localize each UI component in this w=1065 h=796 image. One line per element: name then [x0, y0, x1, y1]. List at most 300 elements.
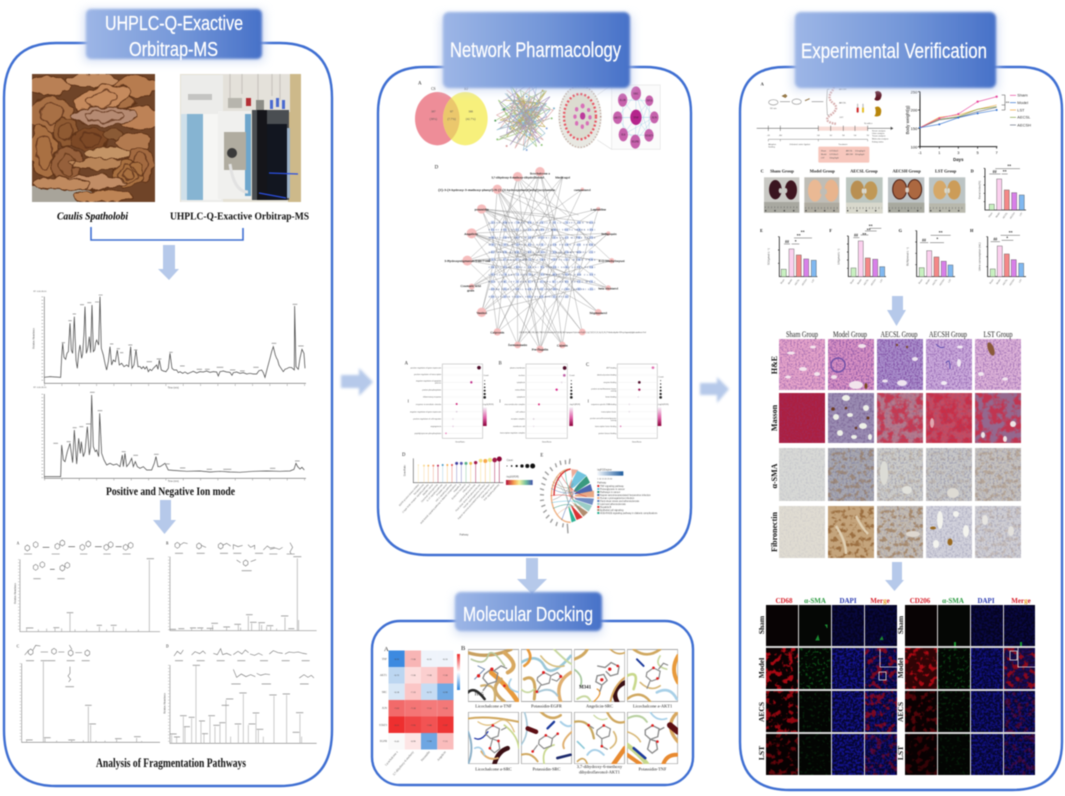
experimental design schematic: Molecular analysis	[872, 137, 888, 140]
line chart: body weight: 1	[938, 150, 941, 155]
title: Experimental Verification: Experimental Verification	[801, 40, 987, 63]
compound-target network: Medicagol	[555, 176, 570, 180]
chart: positive ion chromatogram	[33, 291, 306, 389]
experimental design schematic: 0.9%NaCl	[829, 154, 839, 156]
GO dot plot C: molecular function: I	[588, 399, 590, 403]
GO dot plot B: cellular component: cell surface	[516, 411, 525, 413]
bar chart D: renal index: Model	[996, 212, 1001, 218]
heatmap of binding energies: Angelicin	[436, 750, 447, 762]
arrow: network pharmacology to docking	[517, 558, 547, 594]
KEGG lollipop chart: Bladder cancer	[422, 483, 434, 496]
compound-target network: PTGS2 RELA HIF1A PTGS1 MAPK14 MMP2 VEGFA IKBKB ESR1	[489, 229, 596, 232]
histology image grid: AECSH Group	[929, 330, 967, 339]
bar chart H: urine volume: Model	[996, 279, 1002, 285]
venn diagram: 387	[431, 110, 436, 114]
compound-target network: Cajanin	[557, 343, 568, 347]
arrow: network pharmacology to experimental verification	[700, 377, 729, 403]
KEGG chord diagram: E	[540, 454, 543, 459]
KEGG chord diagram: TNF signaling pathway	[600, 485, 624, 488]
histology image grid: Sham Group	[786, 330, 818, 339]
GO dot plot B: cellular component: B	[499, 361, 502, 366]
bar chart G: blood urea nitrogen: G	[899, 228, 903, 233]
venn diagram: 97	[450, 110, 454, 114]
experimental design schematic: Serum analysis	[872, 129, 886, 132]
experimental design schematic: AECSL	[839, 102, 847, 105]
compound-target network: formononetin	[508, 343, 527, 347]
KEGG lollipop chart: Endocrine resistance	[451, 483, 467, 500]
experimental design schematic: AECSL	[846, 150, 853, 153]
KEGG chord diagram: Human cytomegalovirus infection	[600, 497, 635, 500]
heatmap of binding energies: -7.97	[442, 724, 448, 727]
GO dot plot C: molecular function: protein serine/threonine/tyrosine	[590, 417, 616, 420]
PPI core target circle and top hub genes: SRC	[633, 91, 639, 95]
KEGG lollipop chart: Chemical carcinogenesis	[420, 483, 439, 503]
chart: fragmentation spectrum C: C	[17, 644, 20, 648]
experimental design schematic: A	[761, 81, 765, 86]
docking pose: Angelicin-SRC	[573, 648, 626, 703]
KEGG lollipop chart: Influenza A	[462, 483, 472, 493]
line chart: body weight: **	[1006, 101, 1009, 105]
GO dot plot C: molecular function: -log10(FDR)	[658, 404, 669, 406]
arrow: MS to network pharmacology	[341, 368, 373, 396]
KEGG lollipop chart: Pathway	[460, 533, 469, 536]
GO dot plot B: cellular component: macromolecular complex	[505, 404, 525, 406]
GO dot plot A: biological process: negative regulation of gene expression	[410, 410, 441, 413]
PPI core target circle and top hub genes: TNF	[633, 115, 639, 119]
KEGG lollipop chart: Hepatitis B	[453, 483, 462, 493]
PPI core target circle and top hub genes: IL1B	[620, 98, 626, 102]
KEGG lollipop chart: Human cytomegalovirus infection	[463, 483, 487, 509]
bar chart F: uric acid: **	[867, 228, 871, 233]
docking pose: Licochalcone a-TNF: H15	[475, 692, 484, 698]
heatmap of binding energies: -7.63	[394, 707, 400, 710]
bar chart E: serum creatinine: LST	[812, 279, 816, 283]
bar chart G: blood urea nitrogen: AECSH	[939, 278, 946, 286]
heatmap of binding energies	[379, 646, 460, 777]
bar chart F: uric acid: AECSL	[863, 278, 870, 286]
docking images: Angelicin-SRC	[586, 704, 613, 708]
KEGG lollipop chart: HIF-1 signaling pathway	[435, 483, 453, 503]
kidney photographs: AECSH Group	[893, 168, 921, 173]
bar chart H: urine volume: H	[970, 228, 974, 233]
GO dot plot C: molecular function: GeneRatio	[632, 441, 642, 444]
histology image grid: Fibronectin	[770, 512, 779, 552]
immunofluorescence grid: CD206 with alpha-SMA: CD206	[910, 597, 931, 605]
experimental design schematic: -8d	[779, 135, 783, 137]
GO dot plot B: cellular component: extracellular	[515, 388, 525, 391]
docking images: Potassidin-SRC	[533, 766, 560, 772]
venn diagram: (7.7%)	[448, 117, 456, 121]
PPI core target circle and top hub genes: EGFR	[632, 140, 639, 144]
bar chart D: renal index: ##	[993, 169, 997, 174]
GO dot plot B: cellular component: receptor complex	[511, 418, 525, 421]
compound-target network: PIK3CA ESR2 PRKCA ABCB1 F2 PIK3R1 SOD1 GSTP1 TGFB1	[489, 266, 596, 269]
heatmap of binding energies: -6.58	[394, 691, 400, 694]
bar chart F: uric acid: AECSH	[870, 278, 877, 286]
arrow: biochemistry to histology	[887, 296, 906, 326]
experimental design schematic: 0.9%NaCl	[829, 151, 839, 153]
chart: negative ion chromatogram: Time (min)	[168, 481, 179, 483]
immunofluorescence grid: CD68 with alpha-SMA: Model	[757, 658, 766, 678]
PPI core target circle and top hub genes: AKT1	[614, 116, 622, 120]
GO dot plot A: biological process: angiogenesis	[431, 426, 441, 428]
kidney photographs: Model Group	[810, 168, 835, 173]
kidney photographs: LST Group	[935, 168, 957, 173]
compound-target network: potassidin	[475, 208, 489, 212]
PPI core target circle and top hub genes: IL6	[621, 133, 626, 137]
KEGG lollipop chart: Kaposi sarcoma-associated herpesvirus infection	[457, 483, 491, 520]
bar chart F: uric acid: **	[869, 223, 873, 228]
chart: positive ion chromatogram: Relative Abundance	[33, 327, 36, 349]
compound-target network: MYC EGFR STAT3 TP53 BCL2 IL1B PPARG FOS ERBB2	[489, 244, 596, 247]
heatmap of binding energies: STAT3	[379, 724, 388, 727]
docking images: dihydroflavonol-AKT1	[579, 770, 620, 774]
line chart: body weight: 150	[911, 126, 918, 131]
docking pose: Licochalcone a-AKT1	[626, 648, 679, 703]
heatmap of binding energies: JUN	[382, 707, 387, 710]
compound-target network: Lupinidine	[591, 208, 606, 212]
GO dot plot C: molecular function: enzyme binding	[603, 382, 616, 384]
line chart: body weight: 7	[996, 150, 999, 155]
heatmap of binding energies: -7.15	[442, 740, 448, 743]
experimental design schematic: 10mg/kg/d	[829, 157, 839, 159]
PPI core target circle and top hub genes: STAT3	[645, 133, 654, 137]
bar chart G: blood urea nitrogen: AECSL	[932, 278, 939, 286]
experimental design schematic: LST	[821, 157, 825, 159]
chart: fragmentation spectrum B: B	[166, 542, 169, 546]
GO dot plot C: molecular function: C	[586, 363, 589, 368]
docking pose: Angelicin-SRC: M341	[579, 685, 592, 690]
KEGG chord diagram: Pathway	[597, 481, 607, 484]
bar chart D: renal index: **	[1003, 169, 1007, 174]
docking pose: Licochalcone a-SRC	[467, 712, 520, 765]
bar chart F: uric acid: Sham	[850, 279, 855, 285]
KEGG lollipop chart: Prostate cancer	[436, 483, 448, 497]
experimental design schematic: 0d	[817, 135, 820, 137]
heatmap of binding energies: -7.88	[426, 724, 432, 727]
bar chart F: uric acid: ##	[854, 233, 858, 238]
GO dot plot A: biological process: -log10(FDR)	[483, 404, 494, 406]
compound-target network: licochalcone a	[530, 171, 550, 175]
compound-target network: CYP3A4 RXRA ACHE IGF1 CDK2 MET NOS3 XDH CASP9	[489, 273, 596, 276]
title: UHPLC-Q-Exactive Orbitrap-MS: Orbitrap-MS	[129, 39, 218, 61]
bar chart F: uric acid: **	[862, 232, 866, 237]
docking images: Licochalcone a-AKT1	[633, 704, 672, 708]
GO dot plot A: biological process: A	[405, 361, 409, 366]
KEGG chord diagram: Kaposi sarcoma-associated herpesvirus infection	[600, 494, 651, 497]
experimental design schematic: Sham	[821, 151, 827, 153]
heatmap of binding energies: -6.33	[442, 658, 448, 661]
immunofluorescence grid: CD206 with alpha-SMA: Sham	[896, 615, 905, 634]
docking images: B	[461, 645, 466, 652]
title: UHPLC-Q-Exactive Orbitrap-MS: UHPLC-Q-Exactive	[105, 13, 243, 35]
label: Caulis Spatholobi: Caulis Spatholobi	[57, 212, 128, 222]
GO dot plot C: molecular function: transcription factor	[601, 410, 617, 413]
venn diagram: (42.7%)	[466, 117, 476, 121]
bar chart G: blood urea nitrogen: BUN(mmol·L⁻¹)	[906, 247, 910, 266]
GO dot plot C: molecular function: identical protein binding	[597, 374, 616, 377]
chart: fragmentation spectrum D: Relative Abundance	[163, 692, 166, 714]
venn diagram: CS	[431, 87, 436, 91]
GO dot plot A: biological process: positive regulation of cell migration	[413, 418, 441, 421]
bar chart F: uric acid: LST	[880, 279, 884, 283]
KEGG chord diagram: Fluid shear stress and atherosclerosis	[600, 500, 640, 503]
line chart: body weight: AECSH	[1017, 122, 1031, 127]
protein interaction network	[494, 80, 555, 151]
compound-target network: (Z)-3-(4-hydroxy-3-methoxy-phenyl)-N-[2-(4-hydroxyphenyl)ethyl]acrylamide	[438, 188, 555, 192]
GO dot plot A: biological process: inflammatory response	[423, 396, 441, 399]
GO dot plot C: molecular function: heme binding	[605, 397, 616, 399]
experimental design schematic: -14	[767, 135, 771, 137]
bar chart H: urine volume: AECSH	[1009, 278, 1016, 286]
GO dot plot C: molecular function: sequence-specific DNA binding	[591, 403, 616, 406]
line chart: body weight: 200	[911, 108, 918, 113]
bar chart H: urine volume: **	[1009, 230, 1013, 235]
bar chart D: renal index	[971, 163, 1026, 220]
compound-target network: (3S,8S,9S,10R,13R,14S,17R)-10,13-dimethyl-17-[(2R,5S)-5-propan-2-yloctan-2-yl]-2,3,4,7,8,9,11,12,14,15,16,17-dodecahydro-1H-cyclopenta[a]phenanthren-3-ol	[519, 331, 647, 334]
bracket connecting both samples	[91, 227, 243, 240]
docking pose: Potassidin-TNF	[626, 711, 679, 765]
heatmap of binding energies: -7.06	[410, 674, 416, 677]
bar chart E: serum creatinine: Sham	[781, 279, 786, 285]
line chart: body weight: Body weight(g)	[905, 105, 910, 134]
bar chart E: serum creatinine: AECSH	[801, 278, 808, 286]
bar chart F: uric acid	[829, 223, 886, 286]
heatmap of binding energies: EGFR	[380, 740, 387, 743]
GO dot plot A: biological process: I	[408, 399, 410, 403]
compound-target network: SRC PTEN NFKB1 SIRT1 ICAM1 GSK3B CDK1 MMP3 CAT	[489, 251, 596, 254]
docking images: 3,7-dihydroxy-6-methoxy	[577, 764, 623, 770]
KEGG lollipop chart: Fluid shear stress and atherosclerosis	[455, 483, 481, 512]
compound-target network: AURKB PPARA GSK3A NOX4 PTK2 SERPINE1 CCNB1 CTNNB1 GJA1	[489, 288, 596, 291]
chart: fragmentation spectrum A: Relative Abundance	[14, 582, 17, 604]
alpha-SMA row	[779, 448, 1021, 501]
label: Positive and Negative Ion mode: Positive and Negative Ion mode	[106, 484, 236, 498]
bar chart G: blood urea nitrogen: *	[936, 237, 938, 242]
GO dot plot B: cellular component: I	[499, 399, 501, 403]
bar chart F: uric acid: F	[829, 228, 832, 233]
experimental design schematic: Tissue analysis	[872, 136, 885, 138]
immunofluorescence grid: CD68 with alpha-SMA: CD68	[775, 597, 793, 605]
line chart: body weight: -1	[918, 150, 923, 155]
bar chart G: blood urea nitrogen: **	[939, 230, 943, 235]
heatmap of binding energies: AKT1	[380, 674, 388, 677]
bar chart F: uric acid: Model	[857, 279, 863, 285]
chart: fragmentation spectrum C	[17, 644, 160, 742]
line chart: body weight: 5	[977, 150, 980, 155]
experimental design schematic: Kidney index	[872, 141, 883, 143]
chart: negative ion chromatogram: RT: 0.00-30.00	[33, 387, 47, 389]
GO dot plot B: cellular component: plasma membrane	[510, 368, 525, 370]
bar chart E: serum creatinine: ##	[785, 239, 789, 244]
line chart: body weight: 3	[957, 150, 960, 155]
bar chart H: urine volume: ##	[993, 237, 997, 242]
immunofluorescence grid: CD68 with alpha-SMA: Sham	[757, 615, 766, 634]
compound-target network: grain	[467, 288, 474, 292]
heatmap of binding energies: 3,7-dihydroxy-6-methoxy	[392, 750, 416, 777]
immunofluorescence grid: CD206 with alpha-SMA	[896, 597, 1035, 775]
heatmap of binding energies: -7.26	[442, 674, 448, 677]
histology image grid: AECSL Group	[880, 330, 918, 339]
KEGG lollipop chart: IL-17 signaling pathway	[426, 483, 444, 502]
heatmap of binding energies: -6.72	[426, 691, 432, 694]
bar chart D: renal index: Sham	[989, 212, 994, 218]
docking pose: 3,7-dihydroxy-6-methoxy-dihydroflavonol-AKT1	[573, 711, 626, 765]
KEGG lollipop chart: AGE-RAGE signaling pathway in diabetic complications	[420, 483, 457, 525]
histology image grid: α-SMA	[770, 463, 779, 488]
GO dot plot C: molecular function: activity	[611, 389, 616, 392]
compound-target network: D	[435, 165, 439, 170]
bar chart E: serum creatinine: Model	[788, 279, 793, 285]
bar chart H: urine volume: AECSL	[1002, 278, 1009, 286]
GO dot plot A: biological process: response to xenobiotic stimulus	[416, 403, 441, 406]
KEGG chord diagram: Epithelial cell signaling	[600, 509, 624, 512]
chart: positive ion chromatogram: RT: 0.00-30.00	[33, 291, 47, 293]
PPI core target circle and top hub genes: JUN	[652, 115, 657, 119]
bar chart E: serum creatinine: **	[797, 233, 801, 238]
experimental design schematic: Treatment	[838, 143, 848, 146]
GO dot plot B: cellular component: transcription regulator complex	[500, 431, 525, 434]
bar chart E: serum creatinine: **	[801, 229, 805, 234]
line chart: body weight: Model	[1017, 100, 1028, 105]
Masson row	[779, 393, 1021, 443]
KEGG chord diagram: Proteoglycans in cancer	[600, 488, 625, 491]
line chart: body weight	[903, 81, 1031, 162]
histology image grid	[770, 330, 1021, 558]
KEGG lollipop chart: Toxoplasmosis	[414, 484, 425, 496]
bar chart D: renal index: Renal index(%)	[978, 181, 982, 199]
KEGG chord diagram	[540, 454, 658, 533]
chart: fragmentation spectrum D	[163, 644, 317, 743]
bar chart G: blood urea nitrogen	[899, 228, 955, 286]
compound-target network: Coumaric acid	[460, 284, 481, 288]
chart: fragmentation spectrum B	[166, 542, 317, 631]
histology image grid: Masson	[770, 404, 779, 431]
heatmap of binding energies: -6.45	[394, 740, 400, 743]
heatmap of binding energies: -8.92	[394, 658, 400, 661]
GO dot plot A: biological process: GeneRatio	[455, 441, 466, 444]
bar chart E: serum creatinine: E	[760, 228, 763, 233]
compound-target network: Calycosin	[490, 330, 505, 334]
venn diagram: 388	[468, 110, 473, 114]
protein interaction network: B	[495, 82, 499, 87]
bar chart E: serum creatinine: *	[795, 239, 797, 244]
GO dot plot C: molecular function: protein serine/threonine kinase	[591, 387, 616, 390]
GO dot plot A: biological process: peptidyl-tyrosine phosphorylation	[415, 432, 441, 435]
immunofluorescence grid: CD68 with alpha-SMA	[757, 597, 897, 775]
panel: UHPLC-Q-Exactive Orbitrap-MS	[4, 43, 332, 786]
experimental design schematic: 30mg/kg/d	[855, 154, 864, 156]
title: Molecular Docking: Molecular Docking	[463, 604, 593, 626]
label: Analysis of Fragmentation Pathways: Analysis of Fragmentation Pathways	[96, 756, 246, 770]
immunofluorescence grid: CD68 with alpha-SMA: DAPI	[839, 597, 857, 605]
GO dot plot A: biological process: positive regulation of gene expression	[411, 366, 441, 369]
GO dot plot A: biological process: process	[435, 383, 441, 385]
KEGG lollipop chart	[398, 453, 535, 536]
docking images	[461, 645, 678, 774]
compound-target network: BAX IL6 NQO1 KDR AR PARP1 HSP90AA1 MTOR CDK4	[489, 258, 596, 261]
heatmap of binding energies: -6.72	[394, 674, 400, 677]
immunofluorescence grid: CD68 with alpha-SMA: AECS	[757, 702, 766, 722]
arrow: histology to immunofluorescence	[885, 562, 904, 591]
compound-target network: Indigoquin	[601, 232, 617, 236]
compound-target network: Pre-flagelin	[532, 348, 548, 352]
bar chart D: renal index: AECSH	[1009, 211, 1016, 220]
heatmap of binding energies: -7.56	[442, 707, 448, 710]
KEGG chord diagram: Hepatitis B	[600, 506, 612, 509]
experimental design schematic: AECSH	[839, 88, 847, 91]
docking pose: Potassidin-EGFR	[520, 648, 573, 703]
heatmap of binding energies: -7.93	[410, 724, 416, 727]
bar chart G: blood urea nitrogen: ##	[922, 238, 926, 243]
GO dot plot B: cellular component: -log10(FDR)	[569, 404, 581, 406]
heatmap of binding energies: -6.90	[410, 740, 416, 743]
heatmap of binding energies: -7.06	[410, 658, 416, 661]
bar chart D: renal index: LST	[1020, 212, 1024, 217]
bar chart E: serum creatinine: SCr(μmol·L⁻¹)	[766, 248, 770, 265]
line chart: body weight: B	[903, 81, 906, 86]
kidney photographs: C	[761, 169, 764, 174]
docking images: Licochalcone a-TNF	[475, 704, 512, 708]
title: Network Pharmacology: Network Pharmacology	[450, 39, 621, 62]
KEGG lollipop chart: Count	[507, 459, 513, 462]
title: Experimental Verification	[793, 12, 998, 90]
GO dot plot A: biological process: Count	[483, 374, 489, 377]
KEGG lollipop chart: TNF signaling pathway	[483, 483, 501, 502]
PPI core target circle and top hub genes: TP53	[646, 99, 653, 103]
chart: negative ion chromatogram	[33, 387, 306, 483]
heatmap of binding energies: A	[384, 646, 389, 653]
bar chart G: blood urea nitrogen: Model	[926, 279, 931, 285]
experimental design schematic: 3d	[842, 135, 845, 137]
bar chart H: urine volume	[970, 228, 1026, 286]
experimental design schematic: Scarifice	[864, 122, 873, 125]
heatmap of binding energies: -7.10	[410, 691, 416, 694]
GO dot plot B: cellular component: GeneRatio	[542, 441, 552, 444]
immunofluorescence grid: CD206 with alpha-SMA: Merge	[1011, 597, 1031, 605]
compound-target network: 3-Hydroxystigmastan-5-en-7-one	[444, 259, 491, 263]
experimental design schematic: SD rats	[770, 107, 777, 110]
PPI core target circle and top hub genes	[558, 82, 660, 149]
chart: fragmentation spectrum D: D	[166, 644, 169, 648]
KEGG lollipop chart: -log10(FDR)	[506, 477, 519, 479]
GO dot plot B: cellular component: nucleus	[519, 375, 525, 377]
panel: Network Pharmacology	[378, 67, 691, 555]
experimental design schematic: Adaptive	[768, 143, 777, 146]
bar chart D: renal index: D	[971, 169, 974, 174]
KEGG chord diagram: 5 10 15 20 25 30	[597, 478, 613, 480]
GO dot plot A: biological process	[405, 361, 494, 444]
GO dot plot C: molecular function: activity	[611, 419, 616, 422]
GO dot plot A: biological process: protein phosphorylation	[422, 388, 441, 391]
GO dot plot B: cellular component: Count	[569, 374, 575, 377]
immunofluorescence grid: CD206 with alpha-SMA: DAPI	[977, 597, 995, 605]
line chart: body weight: Sham	[1017, 93, 1028, 98]
heatmap of binding energies: -7.55	[426, 707, 432, 710]
compound-target network: campesterol	[574, 188, 591, 192]
bar chart D: renal index: **	[1007, 163, 1011, 168]
kidney photographs: Sham Group	[770, 168, 795, 173]
venn diagram: A	[418, 82, 422, 87]
compound-target network: Vestitol	[476, 311, 487, 315]
heatmap of binding energies: -7.98	[426, 740, 432, 743]
bar chart D: renal index: AECSL	[1002, 211, 1009, 219]
bar chart H: urine volume: Sham	[990, 279, 995, 285]
line chart: body weight: AECSL	[1017, 115, 1031, 120]
GO dot plot A: biological process: negative regulation of apoptotic	[416, 380, 441, 383]
experimental design schematic: 7d	[866, 135, 870, 137]
immunofluorescence grid: CD68 with alpha-SMA: LST	[757, 746, 766, 760]
